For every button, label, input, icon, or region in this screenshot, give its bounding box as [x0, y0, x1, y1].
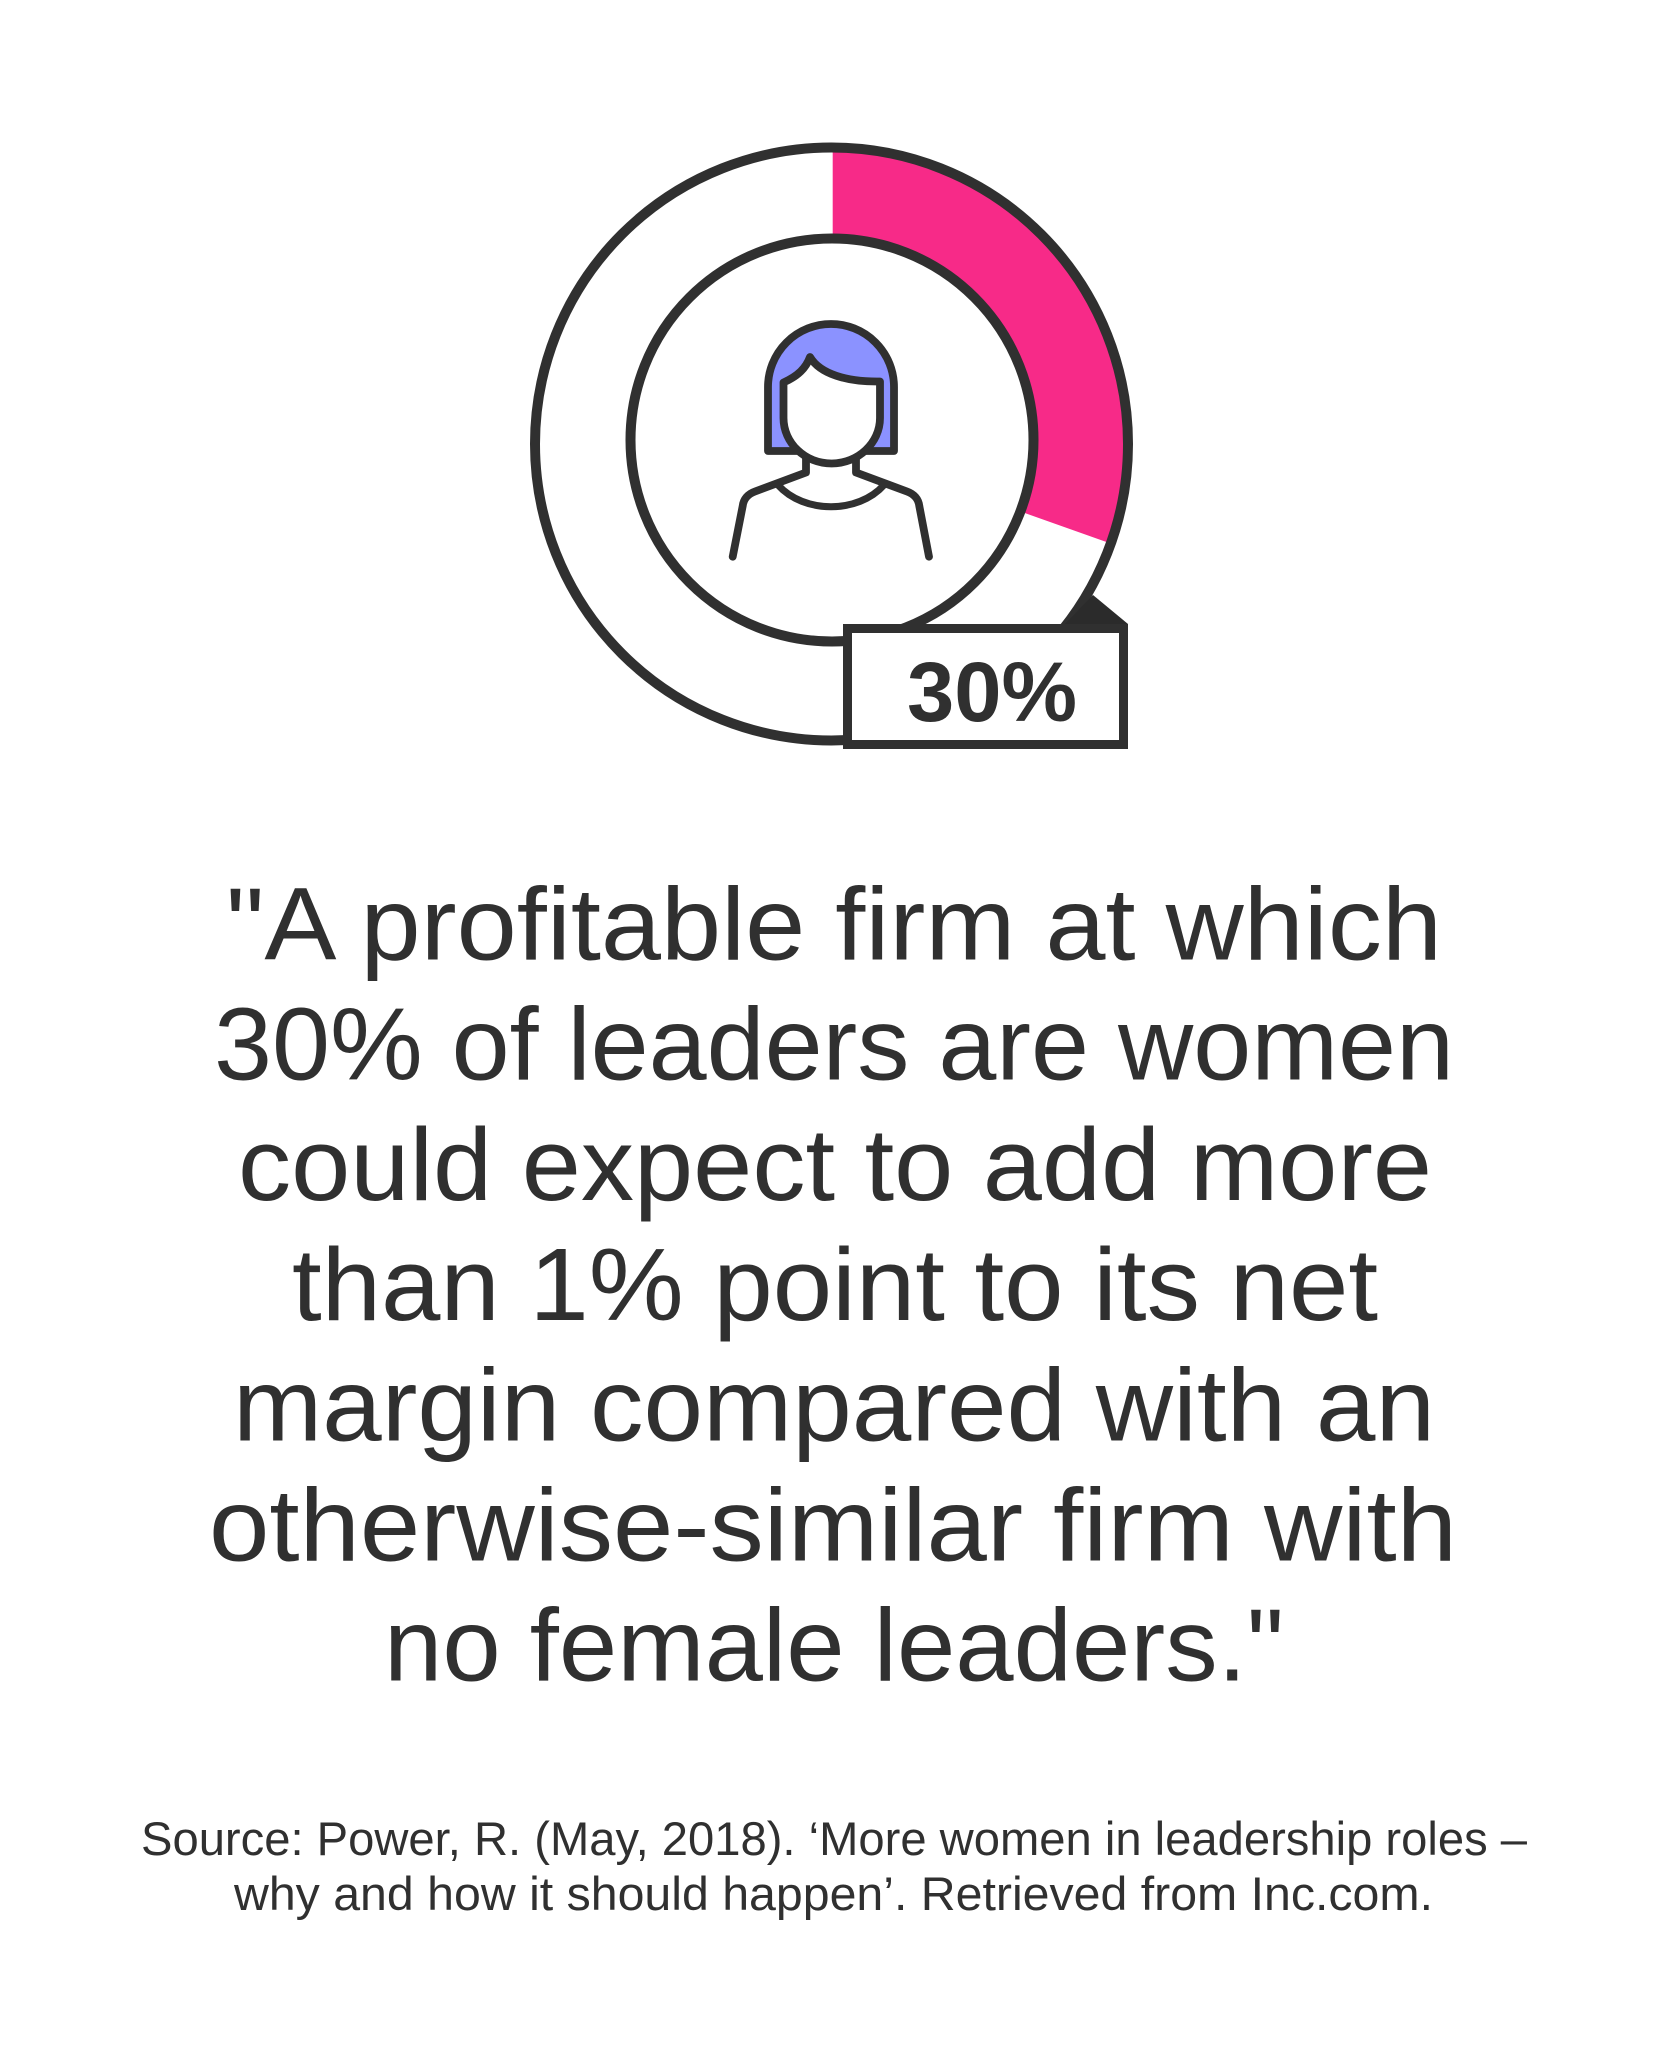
icon: woman leader	[733, 324, 929, 557]
callout fold triangle	[1061, 595, 1128, 628]
quote text: otherwise-similar firm with	[209, 1468, 1457, 1582]
quote text: than 1% point to its net	[292, 1227, 1378, 1342]
quote text: "A profitable firm at which	[226, 866, 1442, 982]
quote text: 30% of leaders are women	[214, 987, 1454, 1102]
callout box	[848, 628, 1124, 744]
donut chart: 30% women leaders	[535, 148, 1128, 740]
source citation	[141, 1812, 1528, 1920]
hair	[768, 324, 894, 451]
quote text: could expect to add more	[238, 1107, 1432, 1222]
outer ring	[535, 148, 1128, 740]
source citation: Source: Power, R. (May, 2018). ‘More women in leadership roles –	[141, 1812, 1528, 1865]
quote text: no female leaders."	[384, 1588, 1284, 1703]
inner ring	[630, 238, 1034, 642]
face	[784, 357, 880, 464]
collar	[778, 485, 884, 507]
quote text	[209, 866, 1457, 1703]
source citation: why and how it should happen’. Retrieved from Inc.com.	[233, 1867, 1433, 1920]
callout: 30% label	[848, 595, 1128, 744]
shoulders and neck	[733, 457, 929, 557]
callout value: 30%	[907, 645, 1077, 739]
quote text: margin compared with an	[233, 1347, 1435, 1462]
pink 30% segment	[833, 148, 1128, 544]
